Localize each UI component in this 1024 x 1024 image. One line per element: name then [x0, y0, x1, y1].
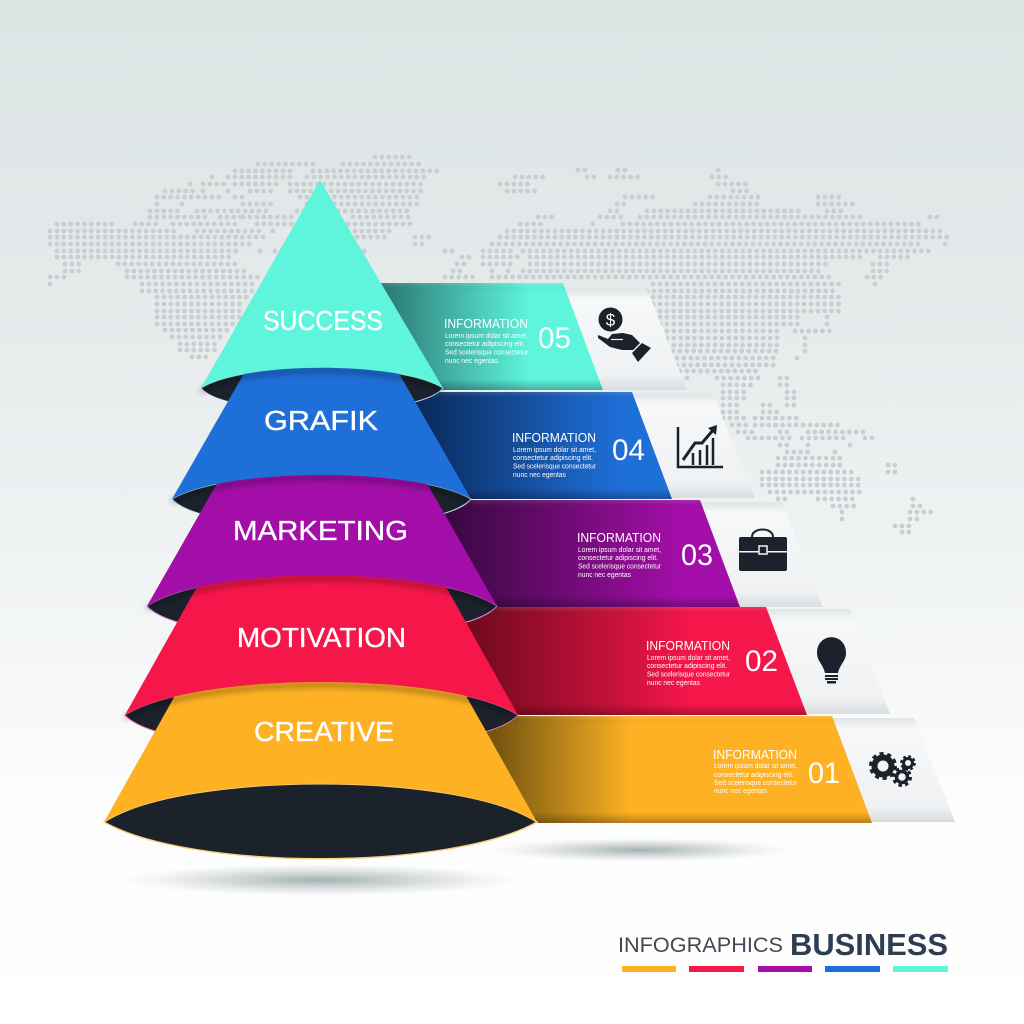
info text 05: Lorem ipsum dolar sit amet, [445, 333, 528, 340]
info text 03 [577, 531, 713, 579]
info text 01: 01 [808, 757, 840, 790]
cone tier: motivation [125, 560, 518, 715]
band 03 white tab [696, 502, 823, 607]
info text 02: Lorem ipsum dolar sit amet, [647, 655, 730, 662]
icon: light bulb [817, 637, 846, 684]
cone tier: success [201, 180, 443, 388]
title: infographics business: INFOGRAPHICS [618, 934, 783, 957]
info text 02: INFORMATION [646, 639, 730, 653]
info text 05: Sed scelerisque consectetur [445, 350, 529, 356]
info text 02: Sed scelerisque consectetur [647, 672, 731, 678]
icon: hand holding dollar [598, 308, 651, 362]
band 04 colour panel [400, 392, 672, 499]
info text 03: Lorem ipsum dolar sit amet, [578, 547, 661, 554]
title: infographics business: BUSINESS [790, 927, 948, 962]
info text 05: consectetur adipiscing elit. [445, 341, 525, 348]
colour legend bars [622, 966, 948, 972]
band 01 colour panel [470, 716, 872, 823]
info text 04: INFORMATION [512, 431, 596, 445]
info text 02: 02 [745, 645, 778, 678]
band 02 colour panel [450, 607, 807, 715]
cone tier: creative: CREATIVE [254, 716, 394, 747]
dotted world map [50, 157, 948, 532]
info text 01: nunc nec egentas [714, 788, 767, 795]
info text 04: consectetur adipiscing elit. [513, 455, 593, 462]
icon: hand holding dollar: $ [606, 310, 616, 330]
icon: growth chart [678, 425, 723, 467]
info text 01: INFORMATION [713, 748, 797, 762]
title: infographics business [618, 927, 948, 962]
icon: gears [871, 754, 915, 786]
band 05 white tab [560, 289, 687, 390]
cone tier: grafik: GRAFIK [264, 405, 378, 436]
info text 05 [444, 317, 571, 365]
info text 03: Sed scelerisque consectetur [578, 564, 662, 570]
cone tier: success: SUCCESS [263, 305, 383, 336]
cone tier: motivation: MOTIVATION [237, 622, 406, 653]
band 04 white tab [628, 394, 755, 498]
cone tier: creative [104, 660, 537, 822]
info text 02: nunc nec egentas [647, 680, 700, 687]
band 02 white tab [762, 609, 890, 714]
cone tier: marketing [147, 450, 497, 606]
cone tier: marketing: MARKETING [233, 515, 408, 546]
info text 02 [646, 639, 778, 687]
info text 05: nunc nec egentas [445, 358, 498, 365]
band 03 colour panel [425, 500, 740, 607]
info text 01 [713, 748, 840, 795]
band 01 white tab [828, 718, 955, 822]
info text 04 [512, 431, 645, 479]
info text 01: Lorem ipsum dolar sit amet, [714, 763, 797, 770]
info text 05: INFORMATION [444, 317, 528, 331]
cone tier: grafik [172, 342, 471, 499]
info text 05: 05 [538, 322, 571, 355]
info text 01: consectetur adipiscing elit. [714, 772, 794, 779]
info text 03: nunc nec egentas [578, 572, 631, 579]
band 05 colour panel [370, 283, 603, 390]
info text 02: consectetur adipiscing elit. [647, 663, 727, 670]
info text 01: Sed scelerisque consectetur [714, 780, 798, 787]
info text 04: 04 [612, 434, 645, 467]
info text 03: 03 [681, 539, 713, 572]
ground shadows [120, 838, 790, 896]
info text 03: consectetur adipiscing elit. [578, 555, 658, 562]
info text 03: INFORMATION [577, 531, 661, 545]
info text 04: Sed scelerisque consectetur [513, 464, 597, 470]
icon: briefcase [739, 530, 787, 571]
cone inner mouths [104, 368, 537, 859]
info text 04: Lorem ipsum dolar sit amet, [513, 447, 596, 454]
info text 04: nunc nec egentas [513, 472, 566, 479]
